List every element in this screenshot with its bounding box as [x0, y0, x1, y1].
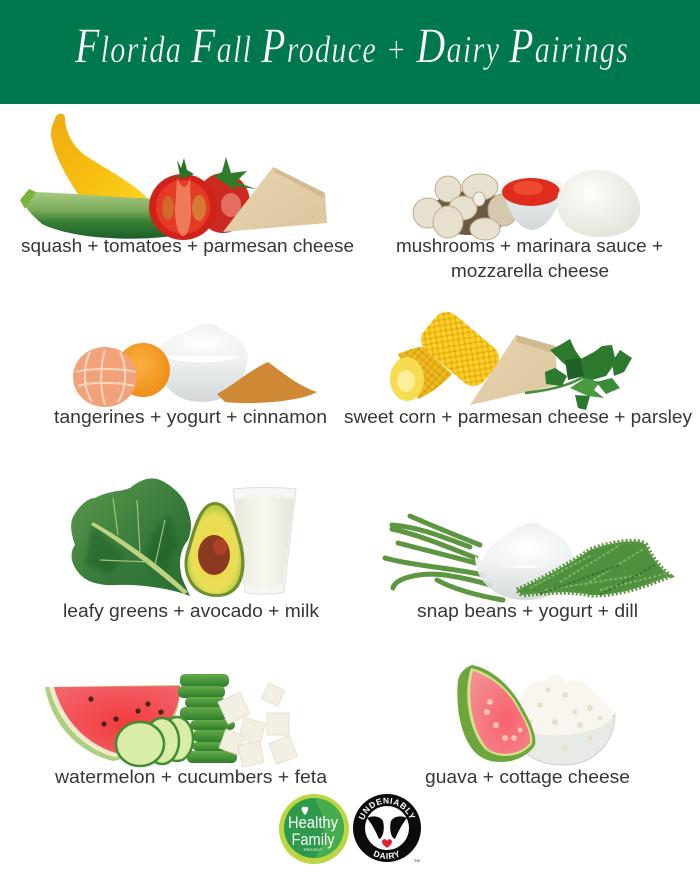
- icon: halved tomato: [149, 158, 217, 240]
- icon: small corn: [390, 347, 452, 401]
- icon: yellow squash: [51, 114, 152, 203]
- panel: guava cottage cheese: [425, 665, 630, 787]
- icon: avocado half: [184, 502, 244, 597]
- icon: feta cubes: [218, 683, 297, 767]
- icon: dill: [517, 541, 670, 595]
- icon: parsley: [525, 339, 632, 410]
- icon: peeled tangerine: [73, 347, 137, 407]
- label: leafy greens + avocado + milk: [63, 601, 320, 621]
- icon: marinara bowl: [502, 178, 562, 230]
- logo: Undeniably Dairy: [353, 794, 421, 863]
- label: snap beans + yogurt + dill: [417, 601, 638, 621]
- icon: bowl of cottage cheese: [513, 674, 615, 765]
- logo wordmark: Family: [292, 830, 335, 849]
- label line 2: mozzarella cheese: [451, 261, 609, 281]
- label: watermelon + cucumbers + feta: [54, 767, 328, 787]
- icon: cucumber slices: [116, 717, 193, 766]
- icon: mushrooms: [413, 174, 518, 240]
- logo heart: [302, 807, 308, 815]
- icon: watermelon slice: [45, 685, 180, 761]
- panel: snap beans yogurt dill: [385, 516, 670, 621]
- trademark: TM: [414, 858, 420, 863]
- icon: parmesan wedge: [470, 335, 558, 405]
- panel: mushrooms marinara mozzarella: [396, 170, 663, 281]
- icon: snap beans: [385, 516, 503, 600]
- icon: milk glass: [233, 488, 296, 594]
- logo lettering: UNDENIABLY: [358, 798, 416, 820]
- logo wordmark: [288, 813, 338, 852]
- panel: squash tomatoes parmesan: [20, 114, 354, 256]
- logo wordmark: Healthy: [288, 813, 338, 832]
- logo: Healthy Family Project: [279, 794, 349, 864]
- icon: cucumber stack: [178, 674, 237, 763]
- icon: yogurt bowl: [475, 523, 575, 600]
- label: tangerines + yogurt + cinnamon: [54, 407, 327, 427]
- panel: corn parmesan parsley: [344, 306, 692, 427]
- label: guava + cottage cheese: [425, 767, 630, 787]
- label: mushrooms + marinara sauce +: [396, 236, 663, 256]
- panel: tangerines yogurt cinnamon: [54, 324, 327, 427]
- icon: collard leaf: [71, 478, 191, 596]
- cow face: [367, 816, 407, 848]
- label: squash + tomatoes + parmesan cheese: [21, 236, 354, 256]
- title: Florida Fall Produce + Dairy Pairings: [74, 18, 628, 73]
- icon: guava half: [457, 665, 535, 762]
- panel: leafy greens avocado milk: [63, 478, 320, 621]
- icon: whole tomato: [196, 157, 256, 233]
- icon: cinnamon pile: [217, 362, 317, 403]
- icon: orange: [116, 343, 170, 397]
- panel: watermelon cucumbers feta: [45, 674, 328, 787]
- logo lettering: DAIRY: [373, 850, 398, 860]
- icon: zucchini: [20, 189, 172, 239]
- logo lettering: [358, 798, 416, 860]
- icon: parmesan wedge: [223, 167, 327, 232]
- icon: yogurt bowl: [155, 324, 248, 402]
- logo wordmark: PROJECT: [304, 847, 323, 852]
- icon: mozzarella: [557, 170, 640, 237]
- label: sweet corn + parmesan cheese + parsley: [344, 407, 692, 427]
- icon: large corn: [415, 306, 505, 392]
- header band: [0, 0, 700, 104]
